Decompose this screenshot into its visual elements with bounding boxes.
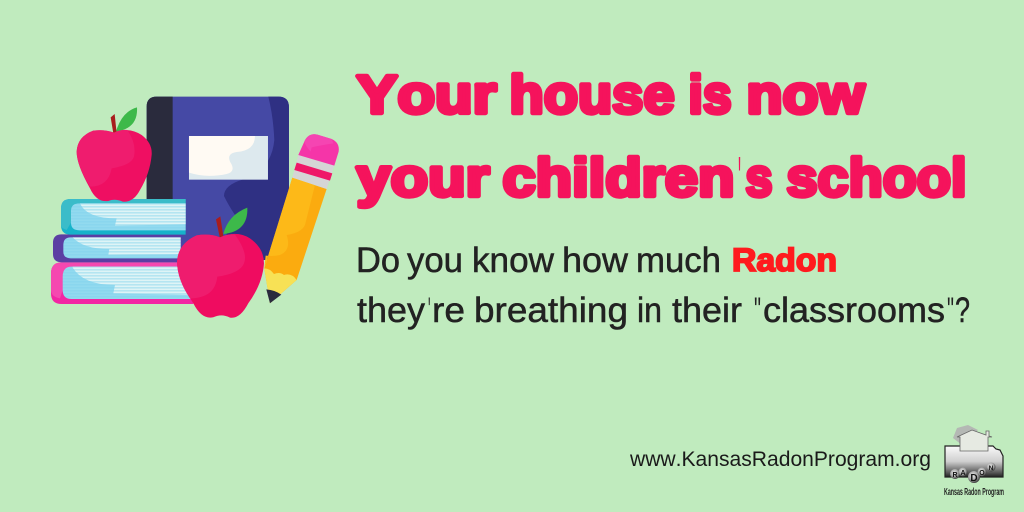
subtitle question: Radon (732, 242, 837, 278)
icon: upper apple (77, 107, 152, 202)
logo smoke (953, 425, 978, 445)
subtitle question: classrooms (763, 291, 945, 330)
subtitle question: how (562, 241, 629, 280)
title: school (786, 148, 966, 208)
website url: www.KansasRadonProgram.org (629, 447, 931, 471)
book: middle purple (53, 234, 182, 262)
subtitle question: you (407, 241, 463, 280)
title: Your (356, 65, 496, 125)
book: bottom pink (51, 262, 197, 304)
logo radon balls (950, 462, 996, 484)
logo: Kansas Radon Program (944, 425, 1004, 498)
illustration: school books, apples and pencil (51, 97, 339, 318)
subtitle question: ' (428, 291, 430, 330)
title: house (510, 65, 674, 125)
subtitle question: their (672, 291, 742, 330)
icon: stack of books (51, 199, 197, 304)
subtitle question: much (636, 241, 721, 280)
subtitle question: in (637, 291, 662, 330)
icon: lower apple (177, 208, 264, 318)
subtitle question: ? (955, 291, 970, 330)
subtitle question (356, 241, 970, 330)
subtitle question: " (947, 291, 954, 330)
subtitle question: re (432, 291, 465, 330)
logo house (957, 430, 992, 451)
subtitle question: they (357, 291, 426, 330)
icon: blue notebook (147, 97, 289, 260)
book: top teal (61, 199, 186, 235)
logo radon balls: R (952, 472, 958, 479)
icon: pencil (264, 134, 339, 303)
title: ' (738, 145, 741, 214)
title: s (746, 148, 772, 208)
subtitle question: know (472, 241, 555, 280)
logo state outline (945, 446, 1003, 477)
title: your (356, 148, 490, 208)
logo radon balls: D (970, 473, 978, 484)
title: children (502, 148, 734, 208)
logo radon balls: N (989, 465, 994, 472)
logo radon balls: A (960, 470, 966, 477)
logo radon balls: O (979, 470, 985, 477)
subtitle question: " (754, 291, 761, 330)
subtitle question: Do (356, 241, 400, 280)
title: now (746, 65, 866, 125)
title: is (688, 65, 732, 125)
title (356, 65, 966, 214)
subtitle question: breathing (474, 291, 628, 330)
